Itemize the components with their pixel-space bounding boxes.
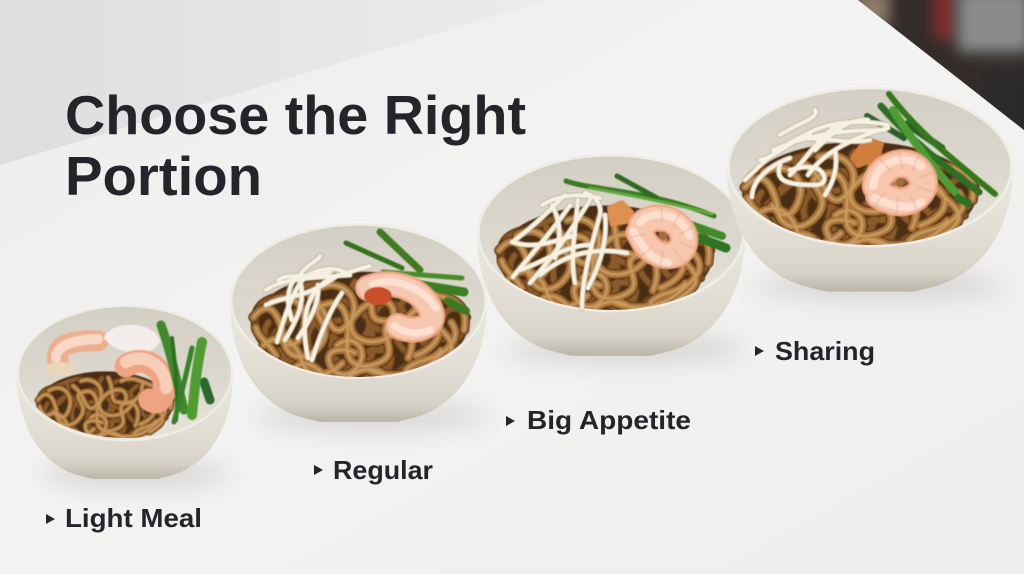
big appetite shrimp: [622, 199, 705, 277]
light meal noodles: [37, 371, 173, 440]
regular greens: [346, 232, 466, 311]
sharing shrimp: [858, 142, 945, 226]
big appetite greens: [566, 176, 726, 248]
regular sprouts: [266, 256, 370, 360]
label: light meal: Light Meal: [65, 503, 202, 533]
dark background corner: [858, 0, 1024, 130]
label: regular: Regular: [333, 455, 433, 485]
label: sharing: Sharing: [775, 336, 875, 366]
bowl: sharing: [727, 87, 1013, 300]
big appetite sprouts: [512, 193, 627, 308]
bowl: regular: [230, 223, 487, 430]
title: [65, 84, 526, 207]
big appetite noodles: [498, 206, 712, 313]
sharing greens: [867, 94, 995, 203]
light meal shrimp and topping: [45, 325, 166, 402]
sharing sprouts: [745, 110, 888, 197]
label: big appetite: Big Appetite: [527, 405, 691, 435]
sharing orange bits: [852, 138, 882, 166]
sharing noodles: [744, 142, 976, 251]
bowl: light meal: [17, 305, 233, 488]
regular noodles: [252, 272, 468, 381]
bowl: big appetite: [477, 154, 745, 363]
big appetite orange bits: [609, 202, 632, 224]
background wall: [0, 0, 548, 165]
title: Portion: [65, 145, 262, 207]
regular shrimp: [364, 282, 436, 333]
title: Choose the Right: [65, 84, 526, 146]
light meal greens: [161, 325, 210, 422]
